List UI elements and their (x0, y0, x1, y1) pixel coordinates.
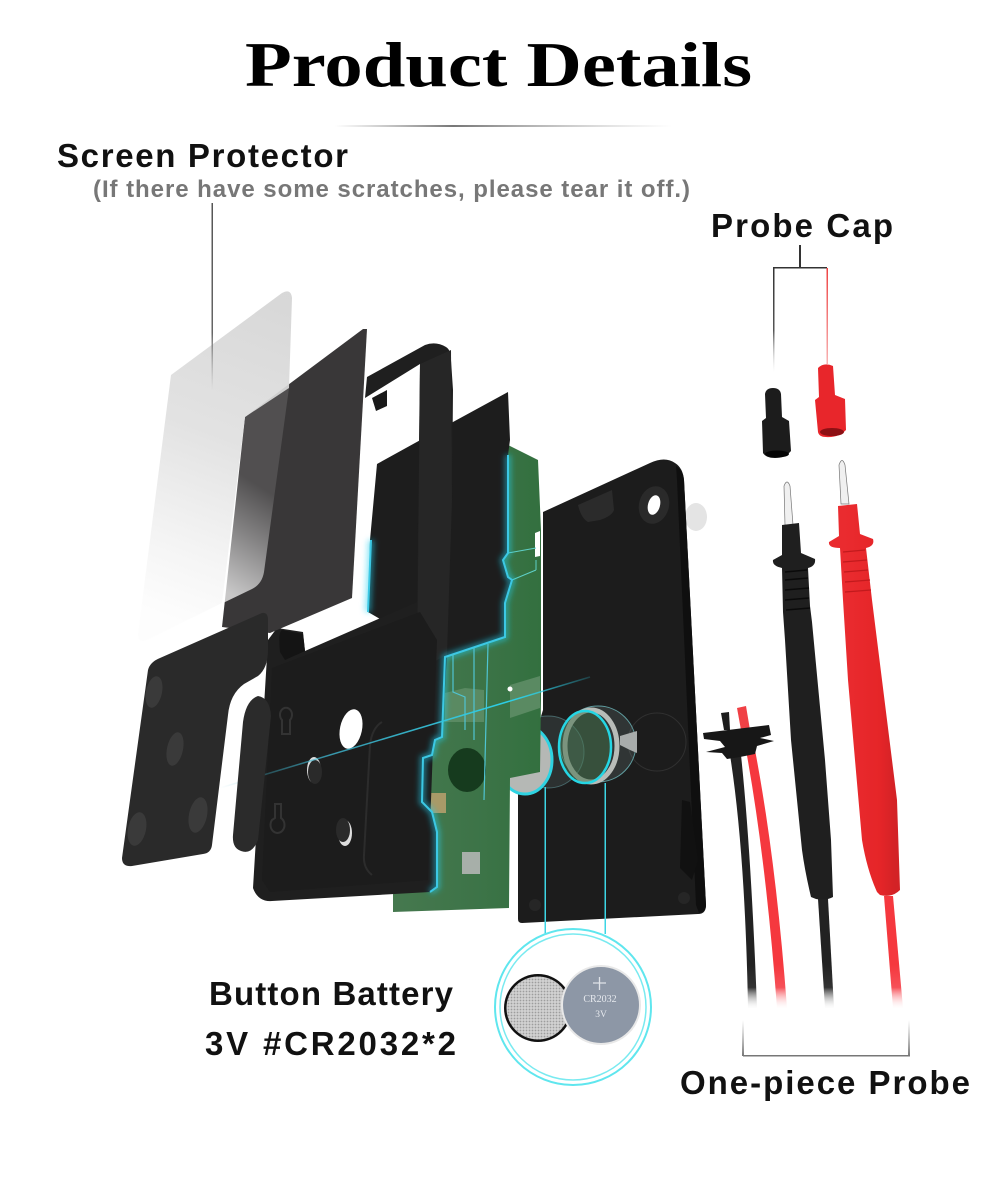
bracket: probe cap (773, 245, 828, 372)
coin: cr2032 face (561, 965, 641, 1045)
heading: button battery: Button Battery (209, 975, 454, 1012)
exploded device (122, 291, 707, 934)
bracket: one-piece probe (743, 1020, 910, 1056)
coin: mesh side (504, 974, 572, 1042)
heading: button battery: 3V #CR2032*2 (205, 1025, 456, 1062)
probe cap: red (815, 364, 846, 437)
leader lines: battery (544, 783, 606, 934)
back case nub (685, 503, 707, 531)
red wire stub (737, 706, 750, 730)
red probe body (829, 504, 900, 896)
panel: dark film (222, 329, 367, 633)
battery: left cell (498, 716, 584, 794)
leader line: screen protector (212, 203, 213, 390)
panel: black gasket (122, 613, 268, 866)
title underline (335, 125, 672, 127)
battery: right cell (559, 706, 637, 783)
black probe body (773, 523, 833, 900)
black probe ridges (785, 570, 810, 610)
red probe tip (839, 460, 849, 504)
panel: circuit board (393, 440, 541, 912)
red probe ridges (843, 550, 871, 592)
panel: clear screen film (138, 291, 292, 641)
connector (703, 725, 774, 759)
heading: screen protector: Screen Protector (57, 137, 348, 174)
coin: cr2032 face: CR2032 (583, 994, 617, 1005)
sight line (220, 677, 590, 788)
probe: black (773, 482, 834, 1008)
coin: cr2032 face: 3V (595, 1010, 607, 1020)
glowing outline: board edge (368, 455, 512, 892)
rubber pad (233, 696, 271, 852)
probe: red (829, 460, 903, 1008)
black probe tip (784, 482, 793, 525)
board pads (430, 793, 446, 813)
heading: button battery (205, 975, 456, 1062)
panel: back case (518, 460, 706, 923)
black wire (730, 755, 757, 1008)
board knob (448, 748, 486, 792)
heading: probe cap: Probe Cap (711, 207, 893, 244)
title: Product Details (245, 29, 752, 100)
heading: screen protector (57, 137, 690, 203)
note: scratches: (If there have some scratches, please tear it off.) (93, 176, 690, 203)
black wire stub (721, 712, 730, 730)
panel: lcd plate (368, 392, 512, 657)
gasket bumps (125, 675, 211, 847)
black probe cable (818, 899, 834, 1008)
red probe cable (884, 896, 903, 1008)
probe wires with connector (703, 706, 787, 1008)
frame holes (336, 707, 366, 751)
keyhole slots (280, 708, 292, 734)
battery callout circle (495, 929, 651, 1085)
red wire (746, 750, 787, 1008)
heading: one-piece probe: One-piece Probe (680, 1064, 970, 1101)
panel: front frame (253, 343, 453, 901)
probe cap: black (762, 388, 791, 458)
